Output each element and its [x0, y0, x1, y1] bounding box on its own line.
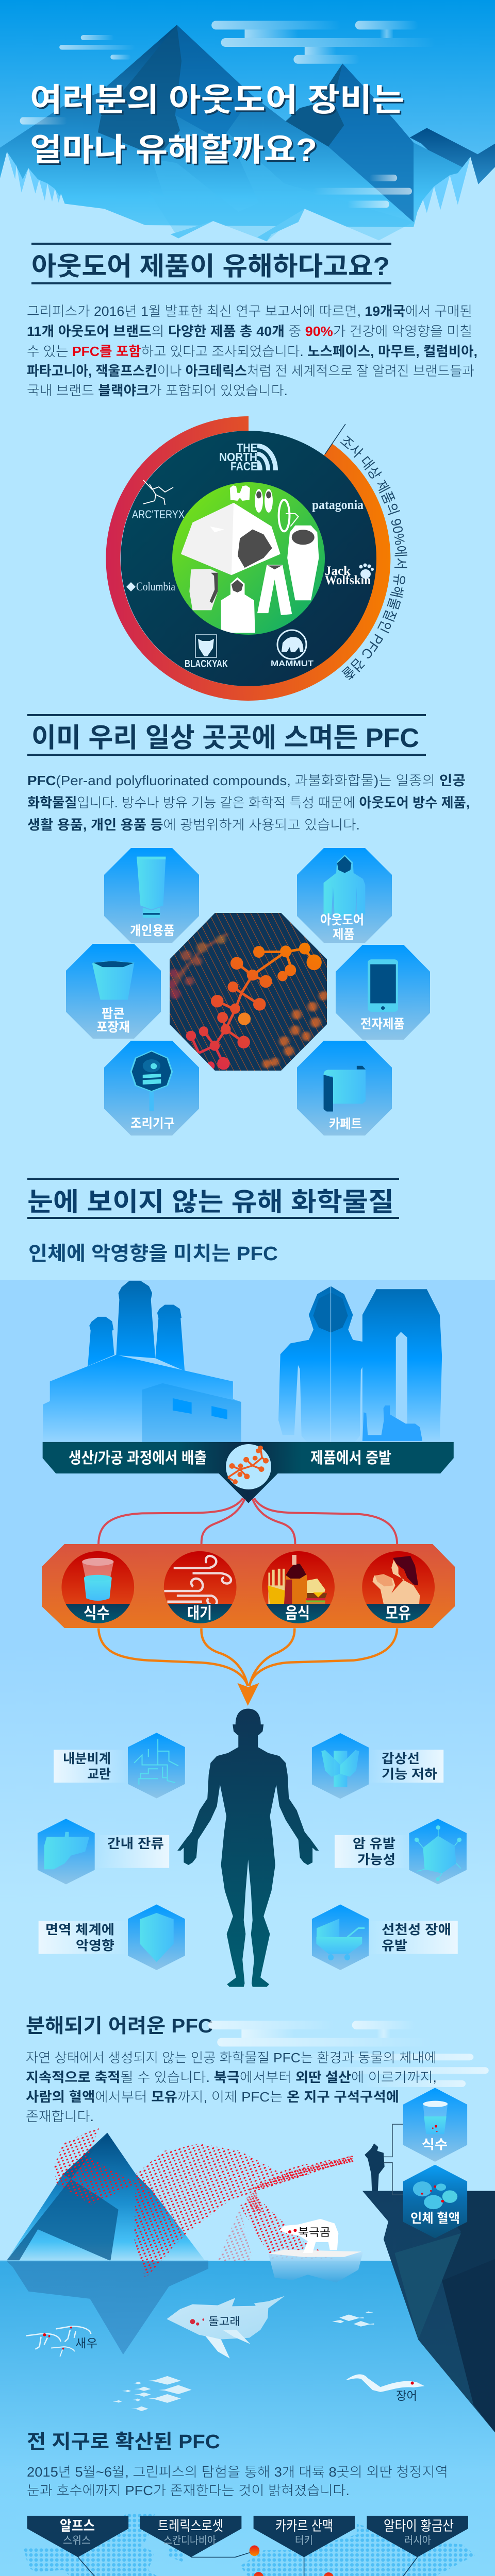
subheading: spread across the globe: 전 지구로 확산된 PFC — [27, 2431, 220, 2453]
sources: factory and clothing silhouettes — [43, 1281, 442, 1446]
octagons: everyday PFC products — [66, 848, 430, 1136]
persistence text: 존재합니다. — [26, 2109, 94, 2124]
heading: outdoor products harmful: 아웃도어 제품이 유해하다고요? — [31, 252, 390, 281]
octagon: cookware: 조리기구 — [130, 1116, 175, 1131]
brand logos: Wolfskin — [325, 573, 371, 587]
heading: PFC everywhere: 이미 우리 일상 곳곳에 스며든 PFC — [31, 723, 419, 753]
effect: cancer — [335, 1819, 467, 1884]
effect: cancer: 가능성 — [357, 1853, 395, 1867]
octagon: popcorn packaging: 팝콘 — [102, 1007, 125, 1021]
intro text: 11개 아웃도어 브랜드 의 다양한 제품 총 40개 중 90%가 건강에 악영향을 미칠 — [27, 324, 472, 339]
scene: iceberg mountain — [0, 2133, 208, 2354]
location labels: 알프스 — [60, 2518, 95, 2534]
effect: immune system: 악영향 — [76, 1939, 114, 1953]
location labels: 카카르 산맥 — [275, 2518, 333, 2534]
PFC definition text — [27, 773, 470, 833]
title: 여러분의 아웃도어 장비는 — [30, 82, 404, 118]
persistence clouds — [208, 2021, 489, 2087]
effect: endocrine disruption — [54, 1733, 185, 1799]
intro text: 파타고니아, 잭울프스킨이나 아크테릭스처럼 전 세계적으로 잘 알려진 브랜드들과 — [27, 363, 474, 379]
brand logos: THE — [237, 441, 257, 454]
octagon: personal care: 개인용품 — [130, 924, 175, 938]
cliff with person — [362, 2143, 495, 2432]
location labels — [37, 2518, 454, 2576]
effect: thyroid: 갑상선 — [382, 1752, 420, 1766]
PFC definition text: 생활 용품, 개인 용품 등 에 광범위하게 사용되고 있습니다. — [27, 817, 360, 833]
route: food — [262, 1551, 335, 1625]
panel: exposure routes — [42, 1544, 455, 1628]
hero mountains — [0, 25, 495, 319]
octagon: popcorn packaging: 포장재 — [96, 1020, 130, 1035]
jacket — [278, 1286, 384, 1446]
banner: emission routes — [43, 1442, 454, 1503]
boot — [362, 1405, 422, 1441]
panel: exposure routes: 음식 — [285, 1604, 310, 1622]
octagon: popcorn packaging — [66, 944, 161, 1039]
effect: congenital disorder — [312, 1905, 458, 1970]
location labels: 터키 — [295, 2535, 313, 2547]
location flags — [27, 2516, 468, 2576]
octagon: cookware — [104, 1041, 199, 1136]
location labels: 스칸디나비아 — [163, 2535, 216, 2547]
octagon: electronics: 전자제품 — [360, 1017, 405, 1031]
expedition text — [27, 2464, 448, 2498]
banner: emission routes: 제품에서 증발 — [310, 1450, 391, 1467]
shrimp: 새우 — [75, 2336, 97, 2350]
brand logos: MAMMUT — [271, 659, 314, 668]
banner molecule — [228, 1446, 269, 1484]
effect: liver retention: 간내 잔류 — [107, 1837, 164, 1851]
pollution plume dots — [54, 2127, 354, 2279]
octagon: carpet: 카페트 — [329, 1117, 362, 1131]
brand logos: BLACKYAK — [185, 658, 228, 670]
pants — [362, 1289, 442, 1441]
persistence text: 자연 상태에서 생성되지 않는 인공 화학물질 PFC는 환경과 동물의 체내에 — [26, 2050, 437, 2065]
PFC definition text: PFC(Per-and polyfluorinated compounds, 과불화화합물)는 일종의 인공 — [27, 773, 466, 788]
hexagon: drinking water contamination — [384, 2088, 467, 2195]
location labels: 알타이 황금산 — [384, 2518, 454, 2534]
polar bear on ice floe: 북극곰 — [298, 2227, 331, 2239]
map pins — [136, 2546, 361, 2576]
effects on the body — [38, 1733, 467, 1970]
product icons — [181, 485, 319, 633]
human body silhouette — [177, 1709, 319, 1987]
effect: immune system — [39, 1905, 185, 1970]
world map with locations — [24, 2514, 475, 2576]
octagon: PFC molecule — [168, 913, 328, 1071]
title: 얼마나 유해할까요? — [30, 132, 317, 168]
brand logos: Jack — [325, 564, 351, 578]
hexagon: human blood — [403, 2165, 467, 2238]
brand logos: NORTH — [219, 450, 257, 464]
effect: liver retention — [38, 1819, 169, 1884]
panel: exposure routes: 식수 — [84, 1604, 110, 1622]
map leader lines — [78, 2552, 417, 2576]
route: drinking water — [60, 1551, 136, 1625]
hero clouds — [20, 21, 436, 208]
intro text: 국내 브랜드 블랙야크가 포함되어 있었습니다. — [27, 383, 288, 398]
octagon: carpet — [297, 1041, 392, 1136]
octagon: outdoor products — [297, 848, 392, 943]
persistence text: 사람의 혈액 에서부터 모유까지, 이제 PFC는 온 지구 구석구석에 — [26, 2089, 399, 2105]
title — [30, 82, 404, 168]
hexagon: drinking water contamination: 식수 — [422, 2138, 448, 2152]
persistence text — [26, 2050, 437, 2124]
orange arrows to body — [98, 1628, 397, 1706]
chart: 90% ring with brands — [106, 416, 407, 701]
subheading: PFC harming humans: 인체에 악영향을 미치는 PFC — [28, 1243, 278, 1265]
octagon: personal care — [104, 848, 199, 943]
brand logos: FACE — [230, 460, 257, 473]
route: breast milk — [362, 1551, 436, 1625]
subheading: hard to decompose: 분해되기 어려운 PFC — [26, 2015, 213, 2037]
eel — [345, 2375, 424, 2402]
route: air — [164, 1551, 236, 1623]
sea animals — [26, 2219, 424, 2411]
effect: congenital disorder: 유발 — [382, 1939, 407, 1953]
intro text — [27, 303, 477, 398]
effect: cancer: 암 유발 — [353, 1837, 395, 1851]
PFC definition text: 화학물질입니다. 방수나 방유 기능 같은 화학적 특성 때문에 아웃도어 방수 제품, — [27, 795, 470, 810]
octagon: outdoor products: 제품 — [333, 927, 355, 942]
fish schools — [113, 2311, 374, 2411]
brand logos: ARC'TERYX — [132, 508, 185, 521]
intro text: 수 있는 PFC를 포함하고 있다고 조사되었습니다. 노스페이스, 마무트, 컬럼비아, — [27, 344, 477, 359]
location labels: 트레릭스로셋 — [158, 2518, 223, 2534]
eel: 장어 — [396, 2389, 417, 2402]
expedition text: 눈과 호수에까지 PFC가 존재한다는 것이 밝혀졌습니다. — [27, 2483, 350, 2498]
dotted world map — [24, 2514, 475, 2576]
shrimp — [26, 2326, 97, 2357]
expedition text: 2015년 5월~6월, 그린피스의 탐험을 통해 3개 대륙 8곳의 외딴 청정지역 — [27, 2464, 448, 2480]
octagon: outdoor products: 아웃도어 — [320, 913, 364, 927]
dolphin — [167, 2296, 285, 2359]
hexagon: human blood: 인체 혈액 — [410, 2211, 460, 2226]
effect: endocrine disruption: 교란 — [87, 1767, 111, 1782]
effect: congenital disorder: 선천성 장애 — [382, 1923, 451, 1937]
banner: emission routes: 생산/가공 과정에서 배출 — [69, 1450, 207, 1467]
factory — [43, 1281, 241, 1442]
octagon: electronics — [336, 945, 430, 1040]
effect: endocrine disruption: 내분비계 — [63, 1752, 111, 1766]
heading: outdoor products harmful — [31, 243, 391, 284]
panel: exposure routes: 모유 — [385, 1604, 411, 1622]
ring caption: 조사 대상 제품의 90%에서 유해물질인 PFC 검출 — [340, 435, 407, 680]
dolphin: 돌고래 — [208, 2316, 240, 2328]
location labels: 스위스 — [63, 2535, 91, 2547]
effect: thyroid: 기능 저하 — [382, 1767, 437, 1782]
effect: thyroid — [312, 1733, 443, 1799]
brand logos: patagonia — [312, 498, 364, 512]
location labels: 러시아 — [404, 2535, 431, 2547]
red arrows to exposure routes — [98, 1498, 397, 1545]
persistence text: 지속적으로 축적 될 수 있습니다. 북극에서부터 외딴 설산에 이르기까지, — [26, 2070, 437, 2085]
brand logos: Columbia — [136, 580, 175, 593]
intro text: 그리피스가 2016년 1월 발표한 최신 연구 보고서에 따르면, 19개국에서 구매된 — [27, 303, 472, 319]
heading: invisible harmful chemicals: 눈에 보이지 않는 유해 화학물질 — [27, 1188, 394, 1216]
panel: exposure routes: 대기 — [187, 1604, 212, 1622]
brand logos — [126, 441, 374, 670]
effect: immune system: 면역 체계에 — [45, 1923, 114, 1937]
heading: invisible harmful chemicals — [27, 1178, 399, 1219]
heading: PFC everywhere — [27, 714, 426, 756]
polar bear on ice floe — [268, 2219, 363, 2282]
